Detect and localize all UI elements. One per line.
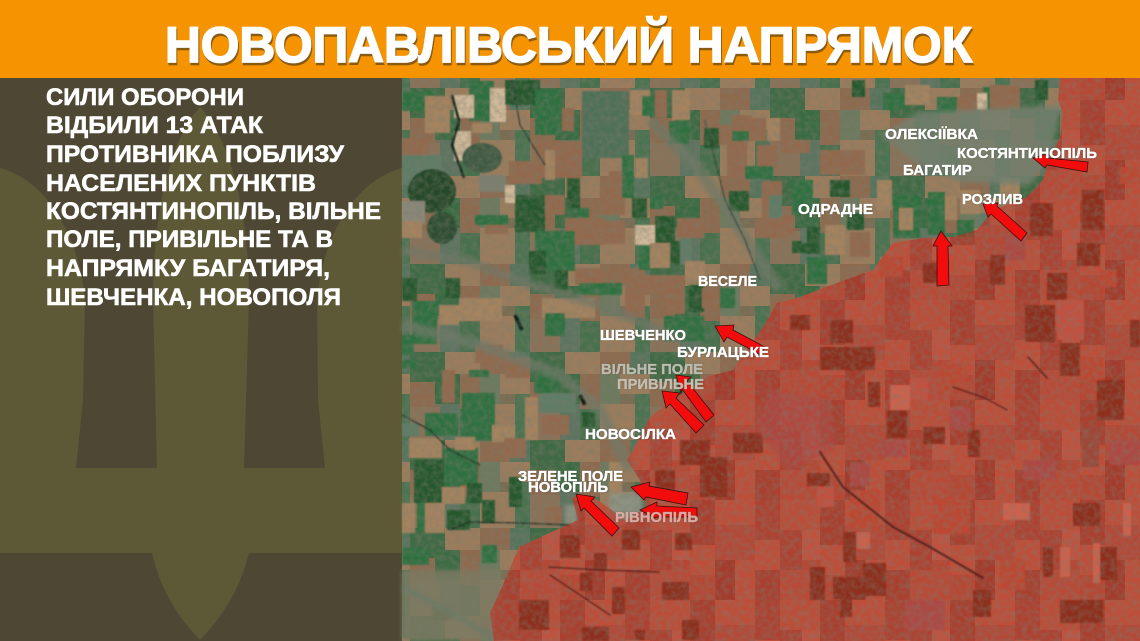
arrow: Zelene Pole (631, 482, 688, 505)
text block: summary: НАСЕЛЕНИХ ПУНКТІВ (46, 170, 316, 197)
label: Burlatske: БУРЛАЦЬКЕ (677, 345, 769, 361)
text block: summary: ПОЛЕ, ПРИВІЛЬНЕ ТА В (46, 226, 333, 253)
arrow: Rozliv (983, 203, 1027, 241)
occupied-zone fields (830, 320, 853, 343)
text block: summary: ПРОТИВНИКА ПОБЛИЗУ (46, 141, 345, 168)
text block: summary: КОСТЯНТИНОПІЛЬ, ВІЛЬНЕ (46, 198, 381, 225)
text block: summary: ВІДБИЛИ 13 АТАК (46, 112, 263, 139)
arrow: Pryvilne (662, 391, 704, 433)
text block: summary: НАПРЯМКУ БАГАТИРЯ, (46, 255, 330, 282)
arrow: Vilne Pole (676, 375, 714, 422)
text block: summary (46, 84, 381, 311)
label: Vilne Pole: ВІЛЬНЕ ПОЛЕ (601, 362, 703, 378)
label: Kostiantynopil: КОСТЯНТИНОПІЛЬ (957, 146, 1097, 162)
arrow: Rivnopil (640, 502, 697, 518)
heading bar (0, 0, 1140, 78)
arrow: Kostiantynopil (1033, 154, 1088, 172)
arrow: Burlatske (715, 325, 765, 355)
label: Shevchenko: ШЕВЧЕНКО (600, 328, 686, 344)
upper-right fields (732, 115, 752, 132)
upper-left fields (402, 91, 435, 111)
label: Vesele: ВЕСЕЛЕ (698, 274, 757, 290)
label: Odradne: ОДРАДНЕ (798, 202, 873, 218)
centre fields (582, 91, 629, 158)
title: НОВОПАВЛІВСЬКИЙ НАПРЯМОК (165, 16, 972, 73)
label: Oleksiivka: ОЛЕКСІЇВКА (885, 126, 979, 143)
label: Novosilka: НОВОСІЛКА (585, 427, 677, 443)
label: Rivnopil: РІВНОПІЛЬ (615, 510, 698, 526)
towns and valleys (402, 105, 1062, 641)
label: Rozliv: РОЗЛИВ (962, 192, 1023, 208)
text block: summary: ШЕВЧЕНКА, НОВОПОЛЯ (46, 284, 341, 311)
text block: summary: СИЛИ ОБОРОНИ (46, 84, 244, 111)
arrow: vertical north (933, 231, 952, 286)
rivers (402, 80, 760, 530)
map labels (518, 126, 1097, 526)
panel: left text panel (0, 78, 402, 641)
arrow: Novopil (576, 494, 619, 536)
lower-left fields (462, 393, 495, 441)
label: Novopil: НОВОПІЛЬ (528, 480, 608, 496)
label: Bahatyr: БАГАТИР (903, 163, 972, 179)
occupied territory overlay (490, 78, 1140, 641)
label: Zelene Pole: ЗЕЛЕНЕ ПОЛЕ (518, 469, 623, 485)
map: satellite view (402, 78, 1140, 641)
icon: trident emblem (0, 107, 402, 640)
gullies (549, 357, 1047, 615)
label: Pryvilne: ПРИВІЛЬНЕ (617, 377, 704, 393)
map grain (402, 78, 1140, 641)
